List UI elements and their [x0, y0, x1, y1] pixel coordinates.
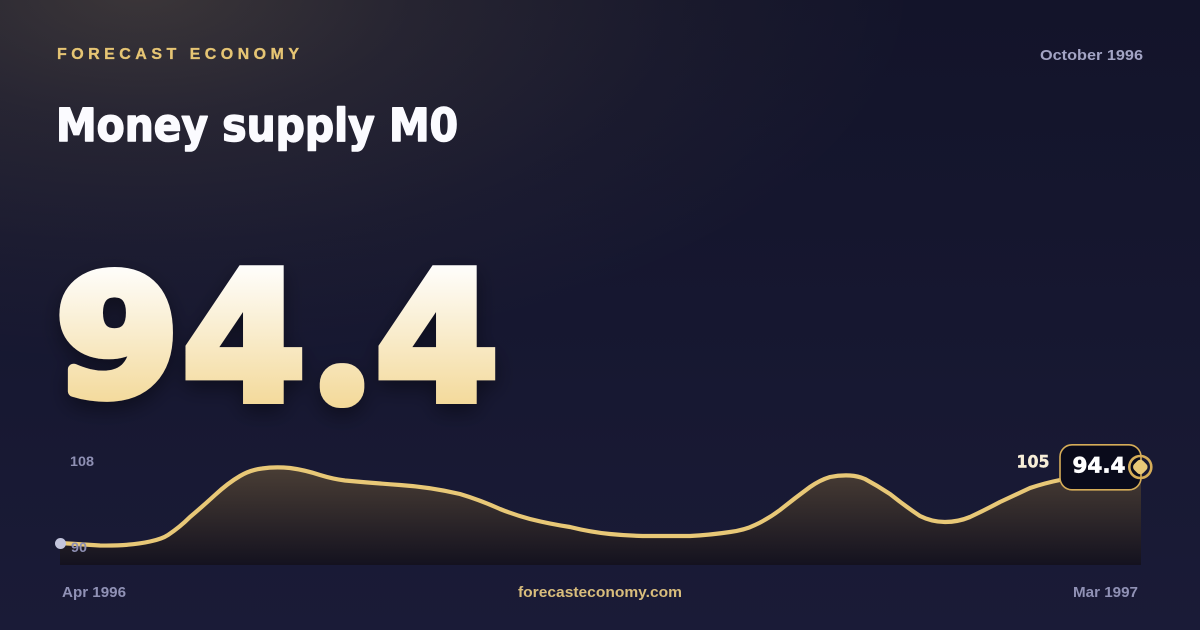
brand label: FORECAST ECONOMY	[57, 46, 299, 63]
axis label: max: 108	[70, 453, 94, 469]
title: Money supply M0	[56, 99, 458, 152]
current value callout: 94.4	[1072, 454, 1126, 479]
start point	[55, 538, 66, 549]
date label: October 1996	[1040, 47, 1143, 64]
headline value: .	[338, 368, 346, 392]
area chart	[55, 445, 1151, 565]
headline value	[56, 234, 499, 442]
source website: forecasteconomy.com	[518, 585, 682, 601]
peak value label: 105	[1016, 452, 1050, 472]
headline value: 9	[56, 242, 178, 434]
axis label: min: 90	[71, 539, 87, 555]
end point marker	[1129, 456, 1151, 478]
headline value: 4	[182, 234, 306, 442]
x-axis start label: Apr 1996	[62, 585, 126, 601]
current value callout	[1060, 445, 1141, 490]
headline value: 4	[375, 234, 499, 442]
trend line	[60, 467, 1060, 546]
x-axis end label: Mar 1997	[1073, 585, 1138, 601]
area fill	[60, 466, 1141, 565]
